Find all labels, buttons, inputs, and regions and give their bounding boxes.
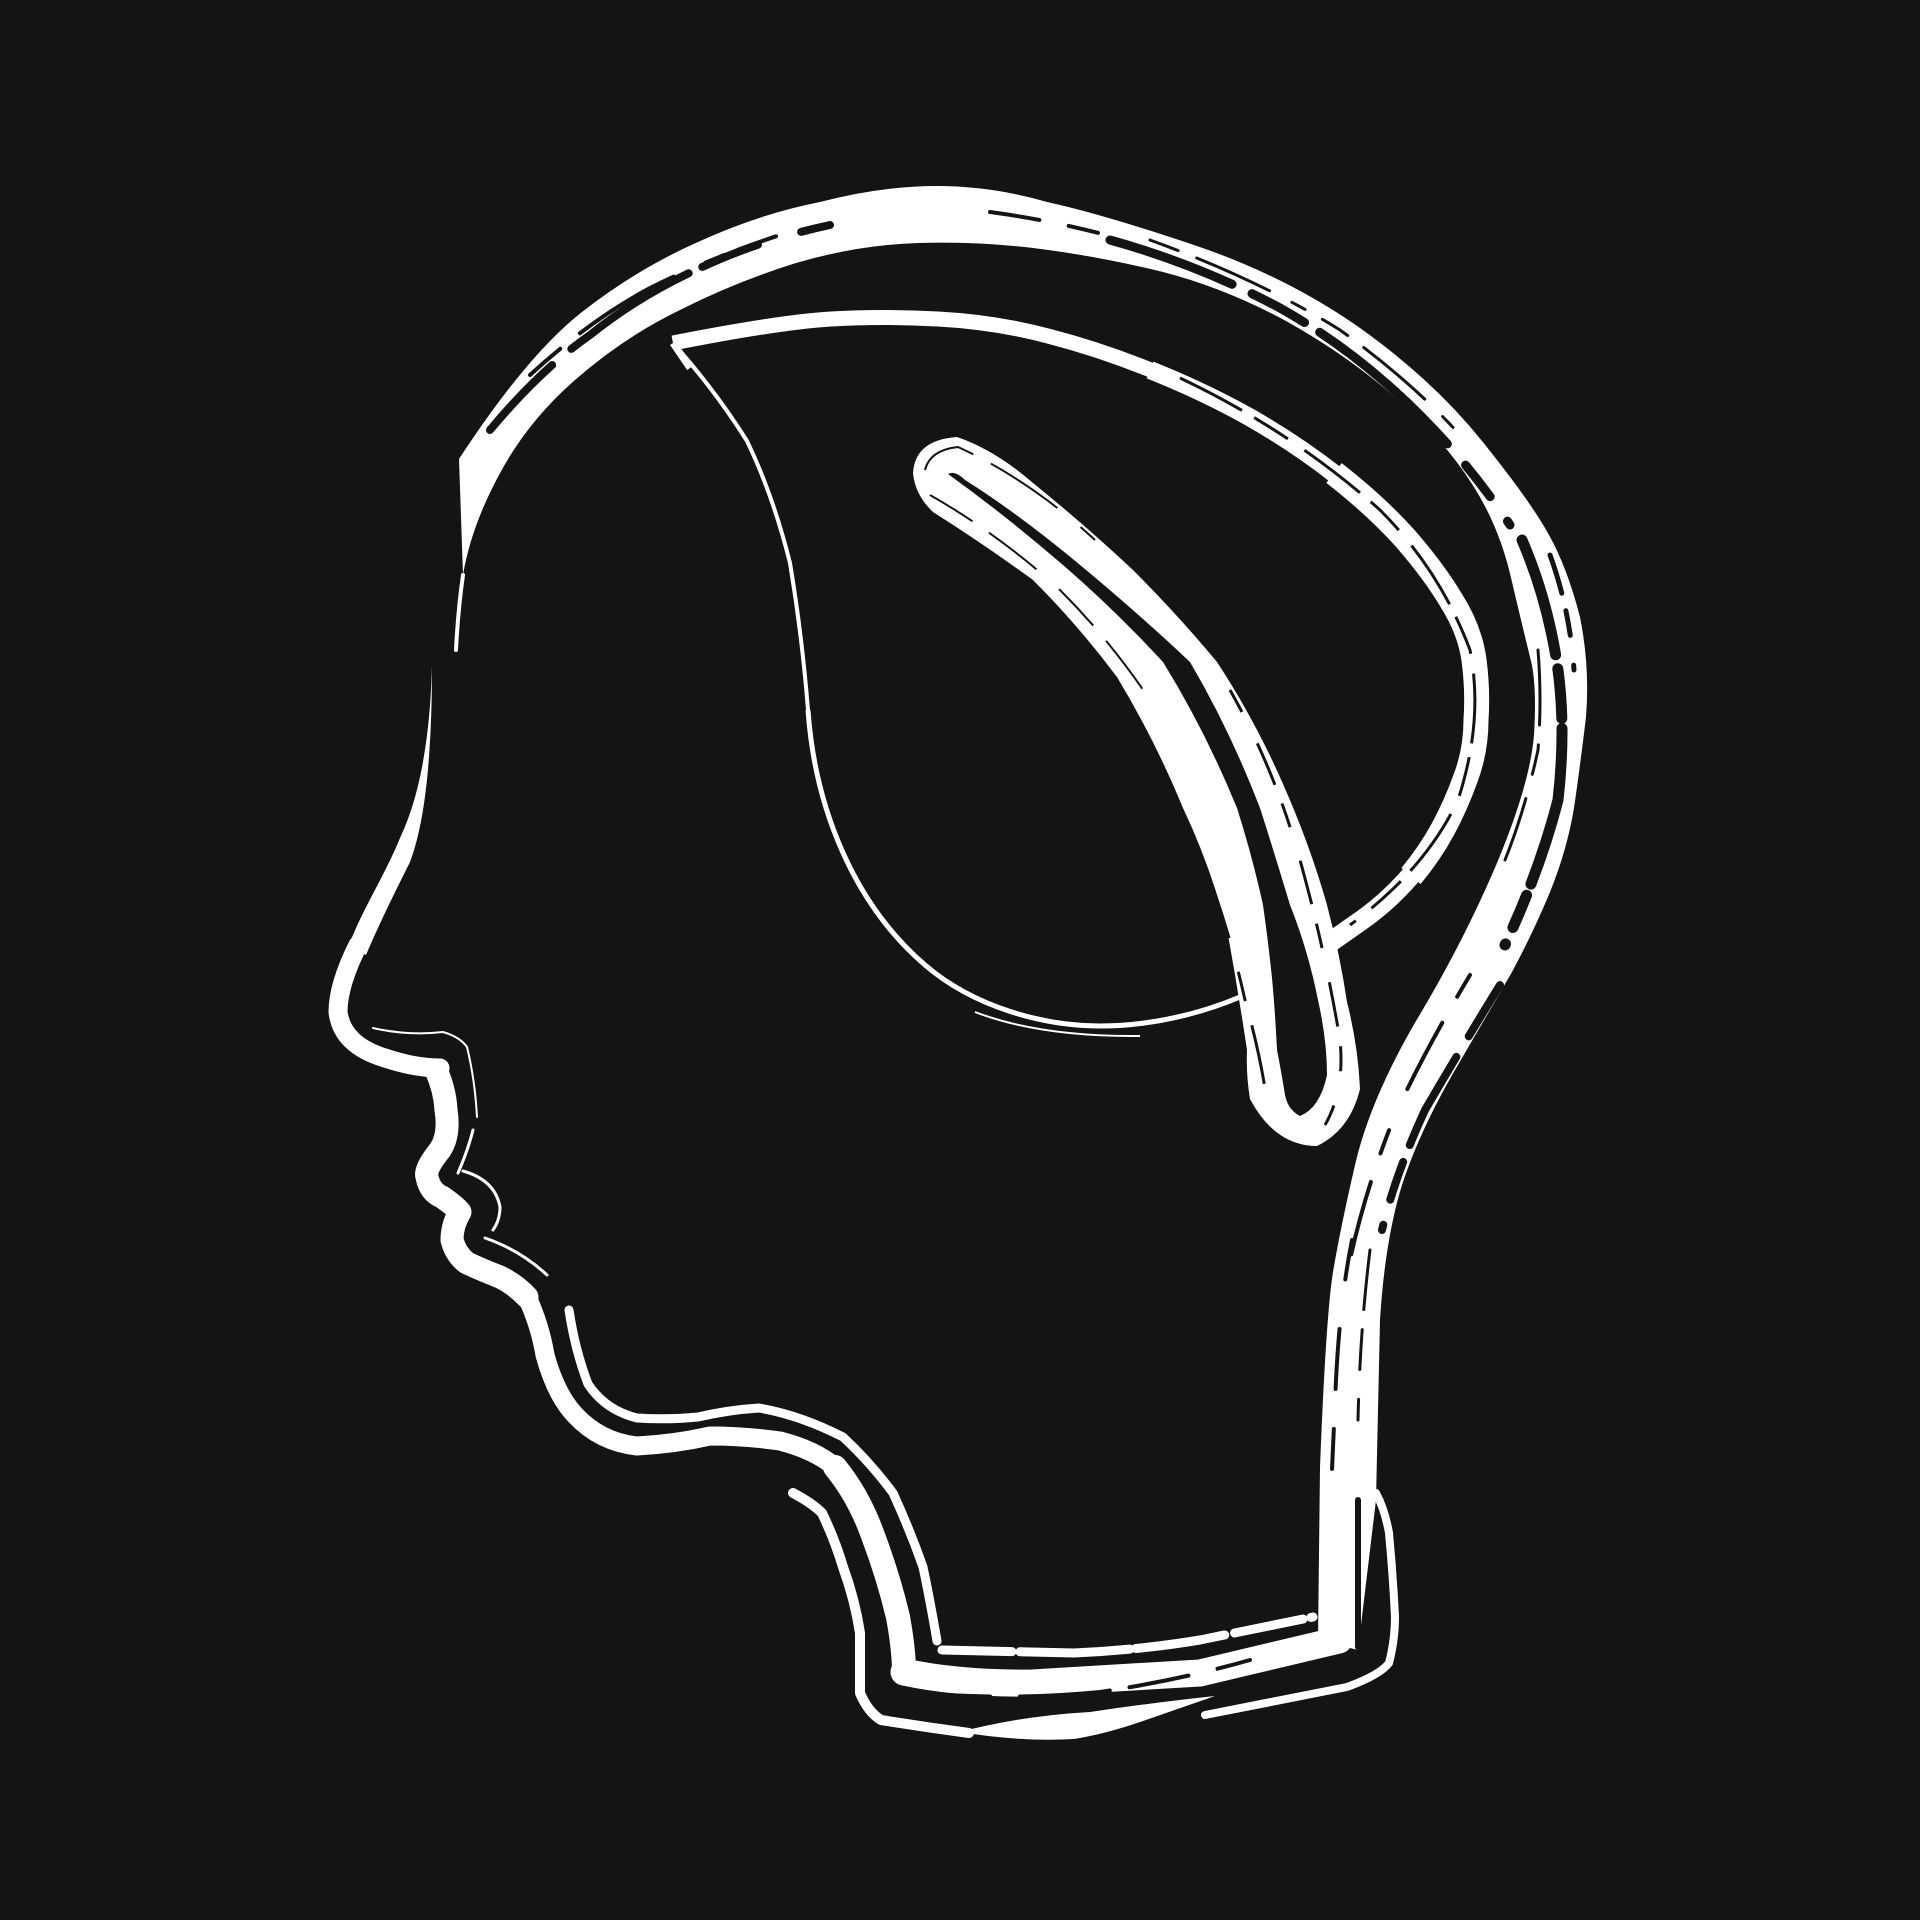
- neck front band: [835, 1467, 904, 1672]
- forehead stroke: [456, 575, 463, 650]
- vein body: [913, 437, 1360, 1146]
- nose and lips: [338, 945, 440, 1068]
- jaw line: [527, 1297, 835, 1467]
- leaf left edge lower: [808, 710, 1240, 1026]
- vein inner slit: [948, 473, 1327, 1116]
- neck outermost thick wedge: [960, 1696, 1215, 1740]
- leaf lower right edge: [1322, 874, 1412, 948]
- neck base upper brush strip: [942, 1617, 1313, 1653]
- neck outermost line left: [793, 1493, 969, 1733]
- leaf top edge: [673, 318, 1153, 371]
- neck base inner band: [904, 1640, 1339, 1683]
- mouth and chin contour: [427, 1070, 527, 1297]
- leaf lower brush trace: [975, 1012, 1140, 1036]
- icon: leaf vein: [913, 437, 1360, 1146]
- neck front thin line: [569, 1310, 937, 1641]
- leaf left edge: [673, 343, 808, 710]
- icon: leaf outline: [673, 318, 1477, 1036]
- brush texture gaps on skull: [490, 212, 1574, 1647]
- icon: head outline: [338, 186, 1587, 1740]
- leaf brush texture: [1180, 378, 1475, 925]
- leaf tip: [673, 343, 690, 368]
- neck outermost line right: [1205, 1493, 1395, 1715]
- neck base texture: [930, 1660, 1250, 1697]
- skull and back of neck brush band: [459, 186, 1587, 1650]
- vein brush texture: [925, 447, 1341, 1125]
- forehead to nose tapered stroke: [349, 665, 432, 955]
- leaf upper right edge: [1150, 370, 1336, 475]
- thin face contour lines: [373, 1028, 547, 1275]
- leaf right edge: [1334, 473, 1477, 876]
